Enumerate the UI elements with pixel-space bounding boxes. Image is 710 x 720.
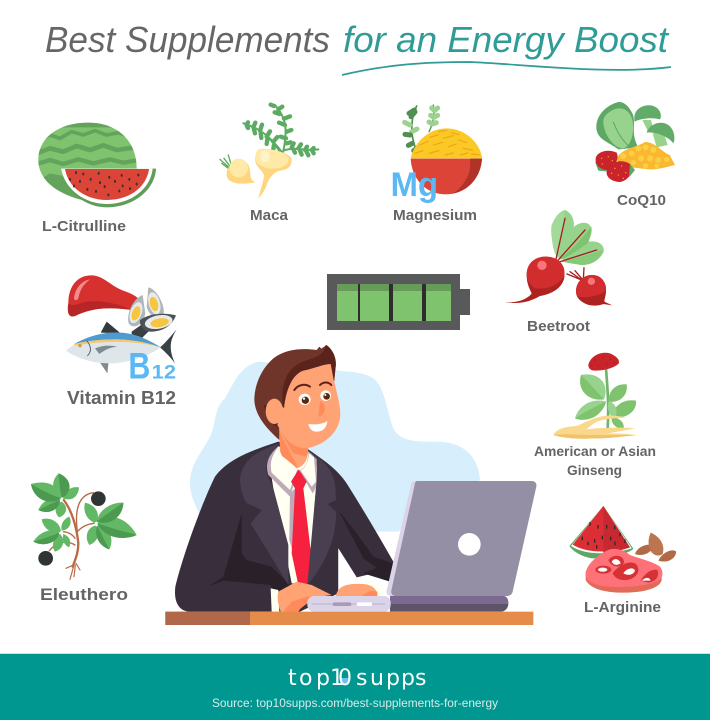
shirt xyxy=(270,447,317,583)
logo capsule fill xyxy=(340,678,350,686)
eyebrows xyxy=(294,382,331,390)
icon: CoQ10 foods xyxy=(595,102,675,182)
jacket xyxy=(175,442,393,612)
icon: maca root xyxy=(220,105,318,199)
laptop screen xyxy=(391,481,536,596)
hair xyxy=(254,345,336,440)
icon: vitamin B12 foods: B xyxy=(128,345,150,387)
icon: magnesium bowl xyxy=(391,105,482,204)
ear xyxy=(266,399,283,424)
collar inner xyxy=(271,446,297,490)
label: L-Arginine: L-Arginine xyxy=(584,599,661,616)
icon: vitamin B12 foods: 12 xyxy=(152,363,176,384)
title: Best Supplements xyxy=(45,19,330,60)
label: American or Asian Ginseng: Ginseng xyxy=(567,462,622,478)
mouth xyxy=(308,421,327,432)
label: American or Asian Ginseng: American or Asian xyxy=(534,443,656,459)
hair shadow xyxy=(264,405,283,428)
laptop screen edge xyxy=(386,481,418,596)
keyboard xyxy=(307,596,391,612)
collar right xyxy=(299,452,318,493)
icon: ginseng xyxy=(553,353,637,439)
title: for an Energy Boost xyxy=(343,19,670,60)
right hand shadow xyxy=(362,591,377,596)
nose xyxy=(318,402,325,417)
collar right inner xyxy=(301,453,316,487)
label: American or Asian Ginseng xyxy=(534,443,656,478)
icon: battery xyxy=(327,274,470,330)
laptop base xyxy=(390,596,508,612)
background blob xyxy=(190,362,480,532)
icon: vitamin B12 foods xyxy=(66,275,177,387)
footer band xyxy=(0,653,710,720)
lapels xyxy=(240,443,288,585)
laptop logo xyxy=(458,533,481,556)
label: Magnesium: Magnesium xyxy=(393,207,477,224)
label: Maca: Maca xyxy=(250,207,289,224)
fringe xyxy=(282,345,336,408)
label: L-Citrulline: L-Citrulline xyxy=(42,218,126,235)
label: Eleuthero: Eleuthero xyxy=(40,585,128,604)
label: CoQ10: CoQ10 xyxy=(617,192,666,209)
shirt placket shadow xyxy=(289,488,295,553)
icon: beetroot xyxy=(504,210,612,306)
jacket shadows xyxy=(208,513,300,612)
neck xyxy=(279,430,308,468)
neck shadow xyxy=(279,430,308,468)
icon: L-Arginine foods xyxy=(569,506,676,593)
desk xyxy=(165,612,533,625)
left hand xyxy=(278,582,332,612)
source: Source: top10supps.com/best-supplements-for-energy xyxy=(212,696,498,710)
icon: watermelon xyxy=(37,123,156,207)
icon: eleuthero xyxy=(31,473,137,579)
collar xyxy=(267,446,298,497)
left cuff xyxy=(271,588,279,612)
right cuff xyxy=(353,578,385,596)
illustration: businessman at laptop xyxy=(165,345,536,625)
right lapel xyxy=(307,451,336,585)
eyes xyxy=(299,390,331,405)
face xyxy=(277,362,340,448)
logo: top10supps xyxy=(288,666,426,691)
left hand shadow xyxy=(283,596,317,612)
title xyxy=(45,19,671,75)
label: Vitamin B12: Vitamin B12 xyxy=(67,388,176,408)
icon: magnesium bowl: Mg xyxy=(391,166,438,204)
label: Beetroot: Beetroot xyxy=(527,318,590,335)
tie xyxy=(291,469,311,585)
right hand xyxy=(336,584,377,596)
